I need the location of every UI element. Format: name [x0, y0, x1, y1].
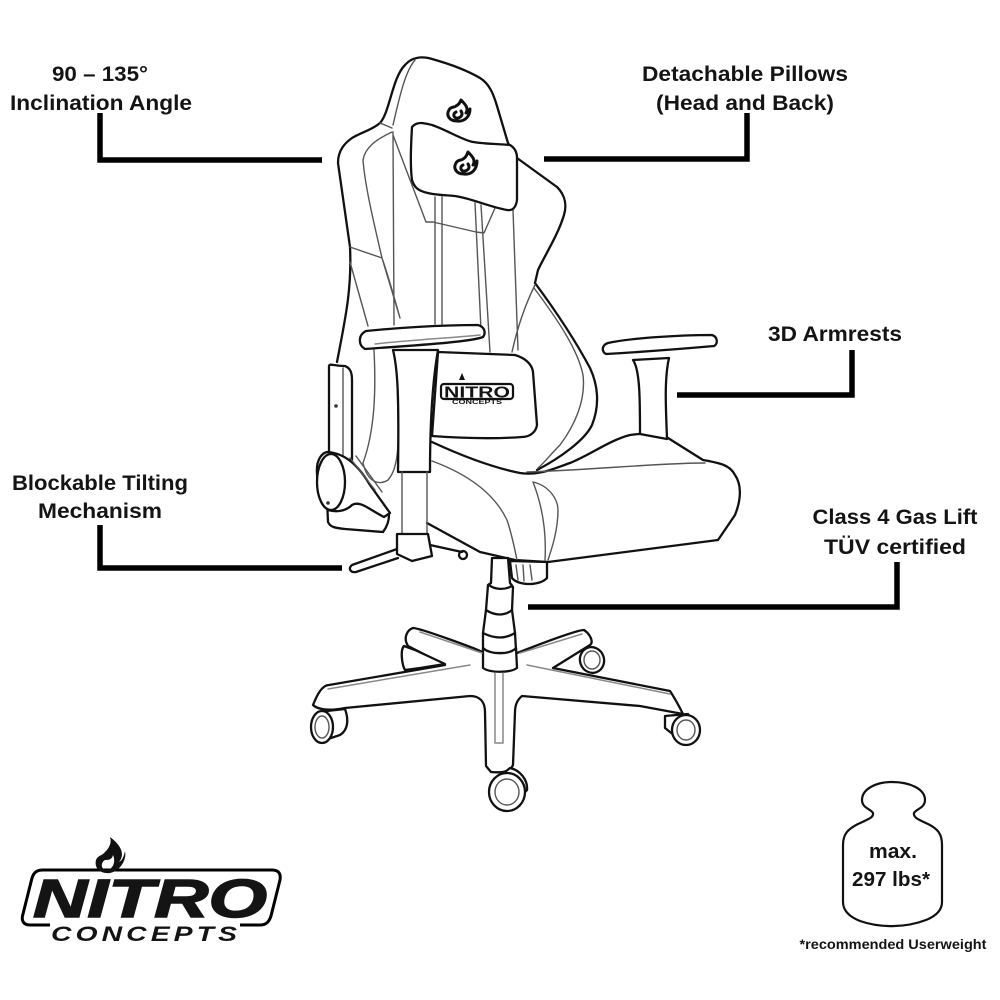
weight icon: 297 lbs* [852, 869, 930, 891]
logo frame [22, 870, 280, 925]
headrest pillow [411, 123, 517, 210]
height adjustment knob [510, 561, 547, 584]
label: 3D armrests: 3D Armrests [768, 323, 902, 346]
leader: inclination [100, 113, 322, 160]
label: gas lift: Class 4 Gas Lift [812, 506, 978, 529]
label: detachable pillows: Detachable Pillows [642, 63, 848, 86]
leader: tilting [100, 525, 342, 568]
footnote: *recommended Userweight [800, 937, 987, 952]
weight text: max. [869, 841, 917, 863]
logo subtitle: CONCEPTS [51, 923, 241, 946]
label: tilting mechanism: Blockable Tilting [12, 472, 188, 495]
leader: pillows [544, 113, 747, 159]
right armrest [603, 335, 717, 439]
seat [427, 434, 740, 562]
star base [313, 628, 683, 772]
left lever side panel [329, 365, 352, 460]
logo wordmark: NITRO [33, 869, 267, 929]
label: inclination angle: Inclination Angle [10, 92, 192, 115]
label: inclination angle [10, 63, 192, 115]
lumbar logo [441, 373, 513, 406]
label: detachable pillows: (Head and Back) [656, 92, 834, 115]
leader: armrests [677, 350, 852, 395]
weight icon [843, 782, 942, 926]
brand logo [22, 837, 280, 946]
label: detachable pillows [642, 63, 848, 115]
tilt lever [350, 534, 467, 572]
logo flame [96, 837, 125, 873]
chair backrest [337, 57, 597, 470]
casters [311, 644, 700, 811]
left armrest [360, 325, 485, 349]
lumbar logo: CONCEPTS [452, 400, 502, 406]
label: inclination angle: 90 – 135° [52, 63, 148, 86]
back side curve [363, 350, 398, 483]
label: tilting mechanism: Mechanism [38, 500, 162, 523]
icon: flame pillow [455, 152, 477, 174]
tilt mechanism [317, 452, 390, 532]
gas piston and column [483, 558, 516, 654]
lumbar logo: NITRO [444, 384, 510, 402]
leader: gas lift [528, 562, 897, 607]
lumbar pillow [432, 352, 537, 438]
chair illustration [311, 57, 740, 811]
left arm column [393, 350, 438, 533]
label: gas lift: TÜV certified [824, 536, 966, 559]
icon: flame top [448, 100, 470, 121]
label: tilting mechanism [12, 472, 188, 523]
label: gas lift [812, 506, 978, 559]
